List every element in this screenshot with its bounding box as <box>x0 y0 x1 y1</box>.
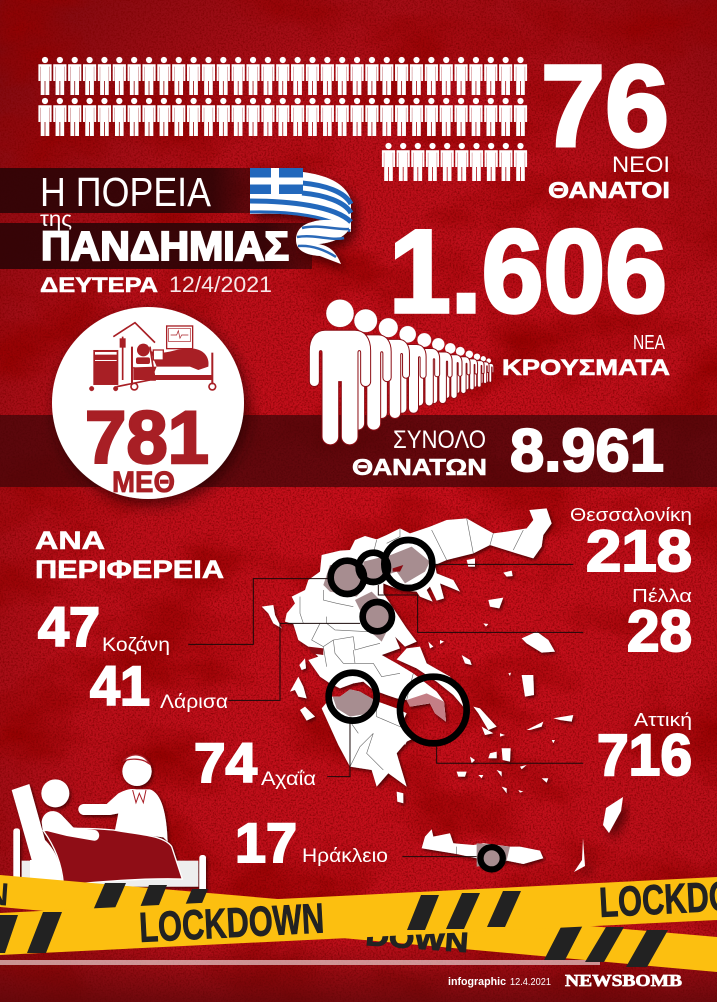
row 2 <box>38 98 527 136</box>
tape: front lockdown tape: LOCKDOWN <box>138 894 325 951</box>
map of Greece <box>188 508 583 869</box>
islands: Rhodes and Karpathos <box>574 797 623 872</box>
title: Η ΠΟΡΕΙΑ <box>40 169 212 215</box>
title and middle dark bands <box>0 168 717 487</box>
row 3 <box>382 143 527 181</box>
land masses <box>262 508 573 864</box>
label: Attica: Αττική <box>634 709 692 730</box>
stat: 1.606 new cases: ΚΡΟΥΣΜΑΤΑ <box>502 355 670 380</box>
title <box>40 169 289 297</box>
region borders <box>300 518 523 854</box>
panel: ICU beds circle: 781 <box>85 396 209 479</box>
stat: total deaths <box>352 417 664 484</box>
icon: Greek flag ribbon <box>250 168 351 264</box>
label: Thessaloniki: Θεσσαλονίκη <box>570 504 692 525</box>
stat: 76 new deaths: ΝΕΟΙ <box>612 152 670 177</box>
panel: ICU beds circle <box>52 307 244 499</box>
label: Thessaloniki <box>570 504 692 584</box>
label: Larisa <box>90 654 228 717</box>
label: Larisa: 41 <box>90 654 150 717</box>
stat: total deaths: 8.961 <box>510 417 664 484</box>
title: της <box>40 208 72 231</box>
label: Achaia: Αχαΐα <box>261 769 316 790</box>
title: 12/4/2021 <box>169 272 272 297</box>
label: Kozani <box>38 595 170 658</box>
label: Pella: Πέλλα <box>632 585 692 606</box>
label: Kozani: 47 <box>38 595 100 658</box>
tape: front lockdown tape <box>0 869 717 955</box>
label: Thessaloniki: 218 <box>586 519 692 584</box>
label: Attica: 716 <box>597 723 692 788</box>
label: Heraklion: 17 <box>235 811 297 874</box>
heading: by region: ΠΕΡΙΦΕΡΕΙΑ <box>35 556 224 584</box>
heading: by region: ΑΝΑ <box>35 527 105 555</box>
tape: back lockdown tape <box>0 875 717 972</box>
credit line <box>448 971 682 990</box>
stat: total deaths: ΣΥΝΟΛΟ <box>393 426 486 454</box>
credit line: infographic <box>448 976 506 988</box>
stat: 1.606 new cases: ΝΕΑ <box>633 332 666 354</box>
pictogram: 76 new deaths <box>38 57 527 181</box>
label: Heraklion: Ηράκλειο <box>302 846 388 867</box>
label: Achaia <box>194 731 316 794</box>
label: Achaia: 74 <box>194 731 257 794</box>
credit line: 12.4.2021 <box>510 976 551 988</box>
highlighted circles <box>329 540 503 869</box>
heading: by region <box>35 527 224 584</box>
icon: queue of people <box>309 299 494 445</box>
stat: 76 new deaths: 76 <box>541 41 669 171</box>
title: ΔΕΥΤΕΡΑ <box>40 274 158 297</box>
credit line: NEWSBOMB <box>565 971 682 990</box>
stat: 76 new deaths: ΘΑΝΑΤΟΙ <box>548 177 670 203</box>
label: Larisa: Λάρισα <box>160 692 228 713</box>
panel: ICU beds circle: ΜΕΘ <box>112 466 175 499</box>
stat: total deaths: ΘΑΝΑΤΩΝ <box>352 454 487 480</box>
hatched strip <box>0 960 600 965</box>
icon: doctor and patient <box>12 755 206 892</box>
row 1 <box>38 57 527 95</box>
label: Kozani: Κοζάνη <box>102 635 170 656</box>
stat: 1.606 new cases: 1.606 <box>389 206 667 338</box>
dark gulf cutouts <box>308 565 403 655</box>
Heraklion marker fill <box>484 850 500 866</box>
label: Pella: 28 <box>627 599 692 664</box>
icon: ICU bed and equipment <box>89 323 216 391</box>
tape: back lockdown tape: DOWN <box>365 920 469 958</box>
label: Heraklion <box>235 811 388 874</box>
highlighted prefectures <box>323 547 510 867</box>
leader lines <box>188 564 583 857</box>
title: ΠΑΝΔΗΜΙΑΣ <box>41 223 289 269</box>
